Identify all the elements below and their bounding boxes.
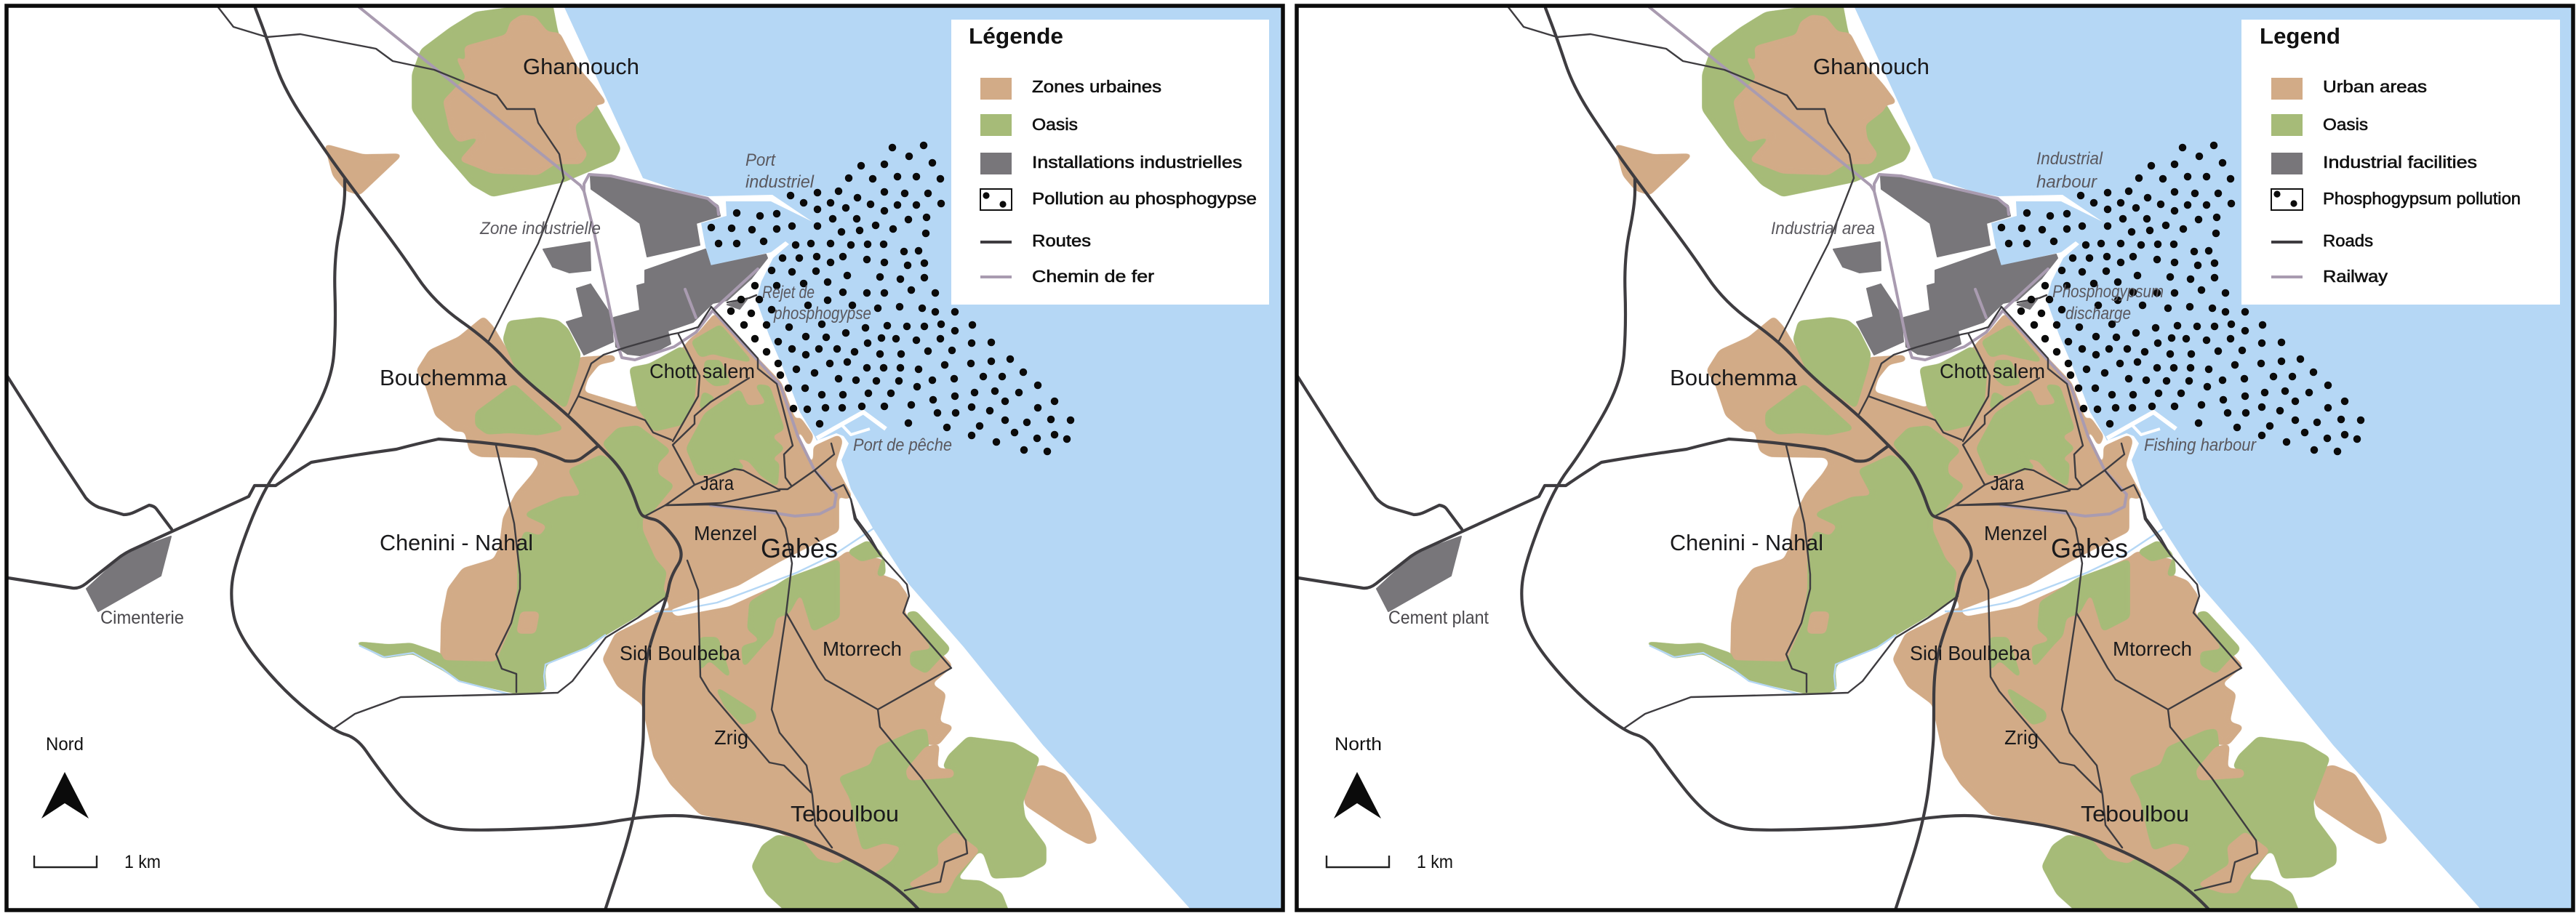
map: French base map xyxy=(7,3,1283,913)
oasis areas xyxy=(356,3,1045,913)
frame xyxy=(7,6,1283,910)
site labels in French: phosphogypse xyxy=(773,304,871,323)
site labels in English: discharge xyxy=(2065,304,2131,323)
town labels: Sidi Boulbeba xyxy=(620,642,740,664)
town labels: Gabès xyxy=(761,534,838,563)
town labels: Chenini - Nahal xyxy=(380,530,533,555)
scale bar xyxy=(1327,852,1453,872)
legend item: pollution: Pollution au phosphogypse xyxy=(1032,189,1257,208)
legend item: roads: Routes xyxy=(1032,231,1091,250)
legend item: roads: Roads xyxy=(2323,231,2373,250)
legend item: oasis: Oasis xyxy=(2323,115,2368,134)
site labels in English: harbour xyxy=(2036,172,2097,192)
legend item: urban: Zones urbaines xyxy=(1032,77,1161,96)
site labels in French: industriel xyxy=(745,172,815,192)
sea xyxy=(1854,6,2573,910)
site labels in French: Cimenterie xyxy=(100,608,184,628)
river xyxy=(1649,528,2164,694)
legend item: urban: Urban areas xyxy=(2323,77,2427,96)
town labels: Sidi Boulbeba xyxy=(1910,642,2031,664)
town labels: Mtorrech xyxy=(2113,638,2192,660)
site labels in English: Cement plant xyxy=(1388,608,1489,628)
site labels in English: Fishing harbour xyxy=(2144,435,2257,455)
main roads xyxy=(7,8,919,910)
legend item: pollution xyxy=(2271,189,2521,210)
town labels: Bouchemma xyxy=(1670,365,1798,390)
legend item: oasis xyxy=(2271,114,2368,136)
fishing harbour breakwaters xyxy=(817,412,886,438)
scale bar: 1 km xyxy=(124,852,161,872)
legend: Legend xyxy=(2241,20,2560,305)
town labels: Chenini - Nahal xyxy=(1670,530,1823,555)
site labels in English: Industrial xyxy=(2036,149,2103,169)
river xyxy=(359,528,873,694)
town labels: Zrig xyxy=(714,726,748,749)
town labels: Teboulbou xyxy=(2081,801,2189,826)
legend item: oasis xyxy=(980,114,1078,136)
legend item: railway: Chemin de fer xyxy=(1032,267,1154,286)
north arrow: North xyxy=(1334,734,1382,819)
site labels in English: Industrial area xyxy=(1771,219,1875,238)
town labels: Gabès xyxy=(2051,534,2128,563)
town labels xyxy=(1670,54,2192,826)
legend item: roads xyxy=(2271,231,2373,250)
secondary roads xyxy=(1508,7,2257,890)
site labels in French: Port de pêche xyxy=(853,435,952,455)
panel: English map xyxy=(1297,3,2573,913)
sea xyxy=(564,6,1283,910)
railway xyxy=(1649,7,2127,516)
legend item: oasis: Oasis xyxy=(1032,115,1078,134)
legend: Légende xyxy=(951,20,1269,305)
town labels xyxy=(380,54,902,826)
urban areas xyxy=(1616,145,2386,877)
urban areas xyxy=(326,145,1096,877)
town labels: Menzel xyxy=(1984,522,2047,544)
town labels: Chott salem xyxy=(1940,360,2045,382)
main roads xyxy=(1297,8,2209,910)
phosphogypsum pollution dots xyxy=(711,145,1071,451)
site labels in French: Port xyxy=(745,150,776,170)
legend item: industrial xyxy=(2271,153,2477,174)
railway xyxy=(359,7,836,516)
scale bar xyxy=(34,852,161,872)
oasis areas xyxy=(1647,3,2335,913)
legend item: pollution xyxy=(980,189,1257,210)
north arrow: Nord: Nord xyxy=(46,734,84,755)
urban patches inside oases xyxy=(444,16,978,892)
town labels: Ghannouch xyxy=(1813,54,1929,79)
site labels in French: Zone industrielle xyxy=(479,219,601,238)
legend item: industrial: Installations industrielles xyxy=(1032,153,1242,172)
frame xyxy=(1297,6,2573,910)
industrial facilities xyxy=(87,177,767,611)
town labels: Ghannouch xyxy=(523,54,639,79)
panel: French map xyxy=(7,3,1283,913)
north arrow: Nord xyxy=(41,734,89,819)
site labels in English xyxy=(1388,149,2257,628)
site labels in English: Phosphogypsum xyxy=(2052,282,2164,302)
site labels in French: Rejet de xyxy=(762,283,815,302)
phosphogypsum pollution dots xyxy=(2001,145,2361,451)
urban patches inside oases xyxy=(1735,16,2268,892)
map: English base map xyxy=(1297,3,2573,913)
town labels: Chott salem xyxy=(649,360,755,382)
town labels: Mtorrech xyxy=(823,638,902,660)
town labels: Jara xyxy=(1991,472,2024,494)
legend item: railway: Railway xyxy=(2323,267,2388,286)
town labels: Zrig xyxy=(2004,726,2039,749)
legend title: Legend xyxy=(2260,23,2340,49)
industrial facilities xyxy=(1377,177,2057,611)
north arrow: North: North xyxy=(1335,734,1382,755)
town labels: Bouchemma xyxy=(380,365,508,390)
town labels: Jara xyxy=(700,472,734,494)
legend item: industrial xyxy=(980,153,1242,174)
secondary roads xyxy=(218,7,967,890)
scale bar: 1 km xyxy=(1417,852,1453,872)
legend item: urban xyxy=(980,77,1161,100)
town labels: Teboulbou xyxy=(791,801,899,826)
legend item: urban xyxy=(2271,77,2427,100)
town labels: Menzel xyxy=(694,522,757,544)
legend item: industrial: Industrial facilities xyxy=(2323,153,2477,172)
legend title: Légende xyxy=(969,23,1063,49)
legend item: pollution: Phosphogypsum pollution xyxy=(2323,189,2521,208)
site labels in French xyxy=(100,150,952,628)
fishing harbour breakwaters xyxy=(2107,412,2176,438)
